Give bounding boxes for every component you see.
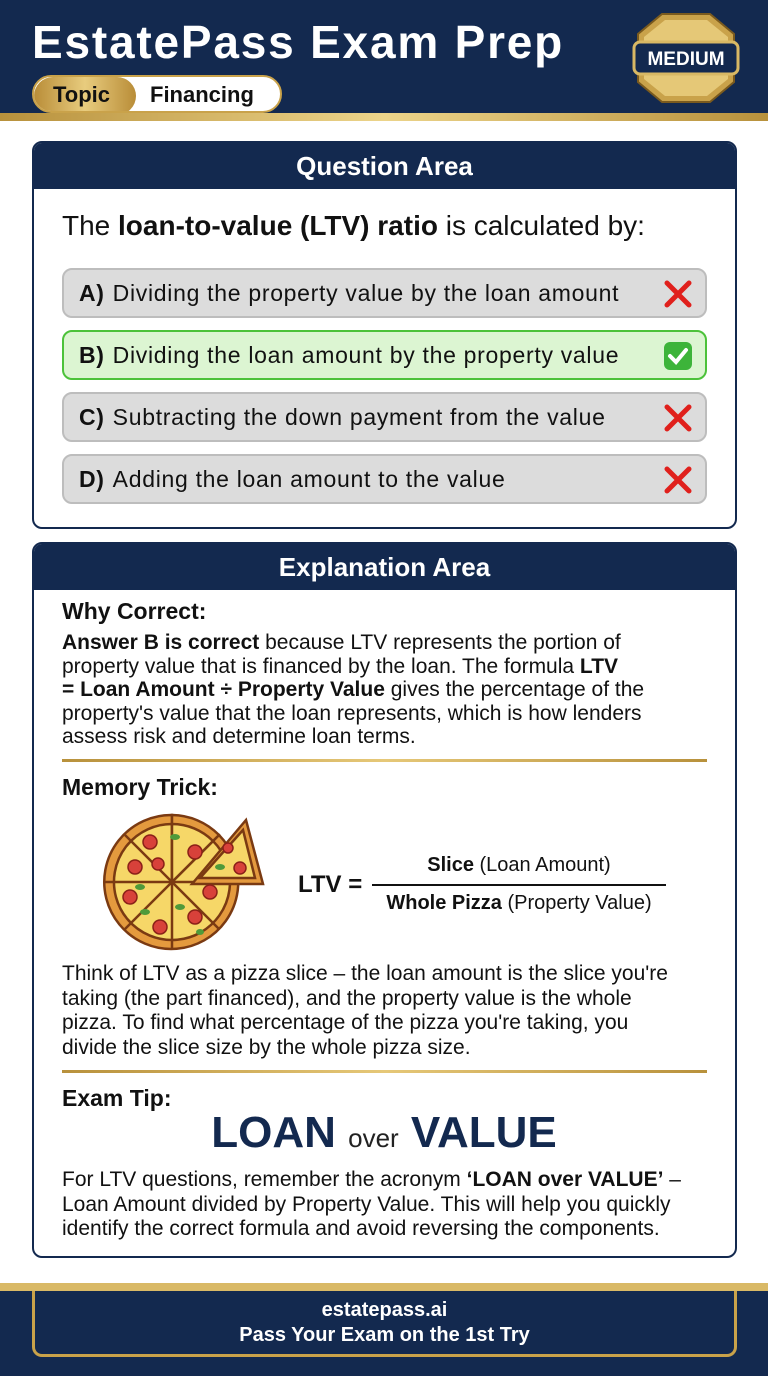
heading: explanation area	[34, 544, 735, 590]
option C	[62, 392, 707, 442]
formula: Whole Pizza (Property Value)	[386, 892, 652, 914]
why correct text: property's value that the loan represents, which is how lenders	[62, 702, 642, 725]
footer box: Pass Your Exam on the 1st Try	[239, 1324, 530, 1346]
why correct text	[62, 631, 644, 748]
why correct text: assess risk and determine loan terms.	[62, 725, 416, 748]
topic pill: Topic	[53, 82, 110, 107]
formula: Slice (Loan Amount)	[427, 854, 611, 876]
why correct text: property value that is financed by the loan. The formula LTV	[62, 655, 618, 678]
option D: D) Adding the loan amount to the value	[79, 466, 505, 492]
heading: explanation area: Explanation Area	[279, 552, 490, 582]
formula	[298, 854, 666, 914]
panel: question area	[32, 141, 737, 529]
heading: question area: Question Area	[296, 151, 473, 181]
memory trick heading: Memory Trick:	[62, 774, 218, 800]
badge: medium	[632, 13, 740, 103]
footer	[0, 1283, 768, 1376]
title: EstatePass Exam Prep	[32, 16, 564, 68]
why correct text: = Loan Amount ÷ Property Value gives the percentage of the	[62, 678, 644, 701]
memory trick text: Think of LTV as a pizza slice – the loan amount is the slice you're	[62, 962, 668, 985]
formula: LTV =	[298, 871, 362, 898]
header band	[0, 0, 768, 113]
exam tip text: identify the correct formula and avoid reversing the components.	[62, 1217, 660, 1240]
acronym: loan over value: LOAN over VALUE	[211, 1108, 557, 1157]
memory trick text: divide the slice size by the whole pizza size.	[62, 1036, 471, 1058]
topic pill	[32, 75, 282, 113]
option B correct: B) Dividing the loan amount by the property value	[79, 342, 619, 368]
exam tip text: Loan Amount divided by Property Value. This will help you quickly	[62, 1192, 671, 1216]
exam tip heading: Exam Tip:	[62, 1085, 172, 1111]
option D	[62, 454, 707, 504]
badge: medium: MEDIUM	[647, 49, 725, 70]
why correct heading: Why Correct:	[62, 598, 206, 624]
exam tip text: For LTV questions, remember the acronym ‘LOAN over VALUE’ –	[62, 1168, 681, 1191]
option C: C) Subtracting the down payment from the value	[79, 404, 606, 430]
footer box: estatepass.ai	[322, 1299, 447, 1321]
panel: explanation area	[32, 542, 737, 1258]
why correct text: Answer B is correct because LTV represents the portion of	[62, 631, 621, 654]
option A: A) Dividing the property value by the loan amount	[79, 280, 619, 306]
option B correct	[62, 330, 707, 380]
topic pill: Financing	[150, 82, 254, 107]
heading: question area	[34, 143, 735, 189]
option A	[62, 268, 707, 318]
memory trick text	[62, 962, 668, 1058]
question text: The loan-to-value (LTV) ratio is calculated by:	[62, 210, 645, 241]
exam tip text	[62, 1168, 681, 1240]
memory trick text: pizza. To find what percentage of the pizza you're taking, you	[62, 1011, 628, 1034]
memory trick text: taking (the part financed), and the property value is the whole	[62, 986, 632, 1010]
footer box	[32, 1291, 737, 1357]
icon: pizza	[103, 814, 265, 950]
